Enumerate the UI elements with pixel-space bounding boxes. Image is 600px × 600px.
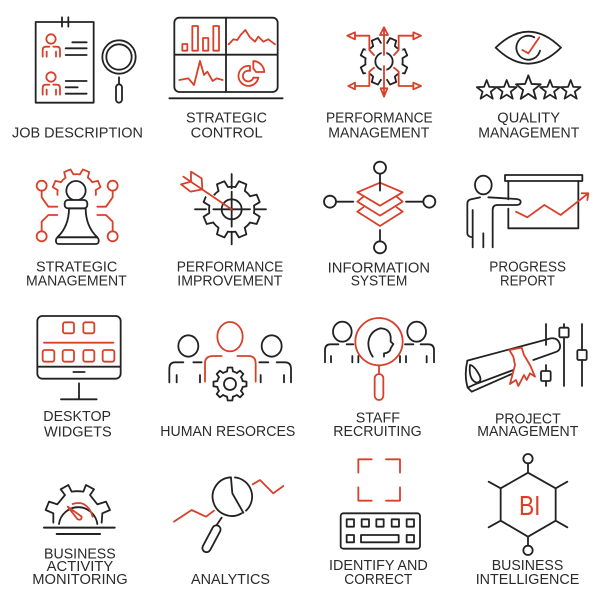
panel: strategic control xyxy=(169,18,283,142)
icon: eye with check and five stars xyxy=(477,32,580,99)
icon: magnifier over candidates xyxy=(325,318,434,400)
label: CORRECT xyxy=(344,572,412,588)
icon: gear target with arrow xyxy=(181,172,269,247)
label: PERFORMANCE xyxy=(326,111,433,127)
label: JOB DESCRIPTION xyxy=(12,126,143,142)
label: ANALYTICS xyxy=(191,572,270,588)
icon: chess pawn with gear and circuit xyxy=(37,161,118,244)
label: REPORT xyxy=(500,274,555,290)
label: IDENTIFY AND xyxy=(329,558,428,574)
icon: focus brackets and keyboard xyxy=(341,459,420,549)
panel: business activity monitoring xyxy=(32,485,128,588)
label: PROJECT xyxy=(495,411,561,427)
label: STRATEGIC xyxy=(36,260,117,276)
label: INFORMATION xyxy=(328,260,430,276)
label: INTELLIGENCE xyxy=(476,572,580,588)
label: IMPROVEMENT xyxy=(177,274,282,290)
BI text: BI xyxy=(519,490,540,521)
icon: diploma scroll and sliders xyxy=(466,324,587,392)
panel: information system xyxy=(324,162,435,290)
icon: job description document and magnifier xyxy=(36,17,136,103)
label: ACTIVITY xyxy=(47,559,114,575)
label: WIDGETS xyxy=(44,425,112,441)
panel: quality management xyxy=(477,32,580,142)
label: RECRUITING xyxy=(333,424,422,440)
label: HUMAN RESORCES xyxy=(160,424,295,440)
label: MANAGEMENT xyxy=(477,424,578,440)
panel: analytics xyxy=(174,477,283,588)
label: STAFF xyxy=(356,410,400,426)
label: PERFORMANCE xyxy=(177,260,284,276)
panel: project management xyxy=(466,324,587,440)
panel: progress report xyxy=(467,175,588,290)
label: QUALITY xyxy=(497,111,560,127)
label: CONTROL xyxy=(191,126,263,142)
panel: staff recruiting xyxy=(325,318,434,440)
label: SYSTEM xyxy=(351,274,407,290)
icon: presenter with chart board xyxy=(467,175,588,247)
icon: magnifier with pie and trend xyxy=(174,477,283,554)
panel: strategic management xyxy=(27,168,126,286)
icon: desktop monitor with widgets xyxy=(37,316,121,399)
panel: human resources xyxy=(160,322,295,440)
label: MANAGEMENT xyxy=(328,126,429,142)
label: MONITORING xyxy=(32,572,128,588)
label: DESKTOP xyxy=(43,409,111,425)
panel: job description xyxy=(12,17,143,142)
label: BUSINESS xyxy=(492,558,563,574)
icon: gear with arrows xyxy=(347,27,421,97)
icon: gear gauge xyxy=(44,485,115,534)
panel: performance management xyxy=(326,27,433,142)
icon: layers network xyxy=(324,162,435,253)
icon: team with gear xyxy=(169,322,291,401)
panel: performance improvement xyxy=(177,172,284,290)
icon: dashboard monitor xyxy=(169,18,283,98)
panel: desktop widgets xyxy=(37,316,121,441)
label: BUSINESS xyxy=(44,546,116,562)
label: STRATEGIC xyxy=(186,111,267,127)
label: MANAGEMENT xyxy=(478,126,579,142)
icon: BI hexagon xyxy=(489,454,567,555)
panel: business intelligence xyxy=(476,454,580,588)
label: MANAGEMENT xyxy=(26,274,127,290)
label: PROGRESS xyxy=(489,260,566,276)
panel: identify and correct xyxy=(329,459,428,588)
